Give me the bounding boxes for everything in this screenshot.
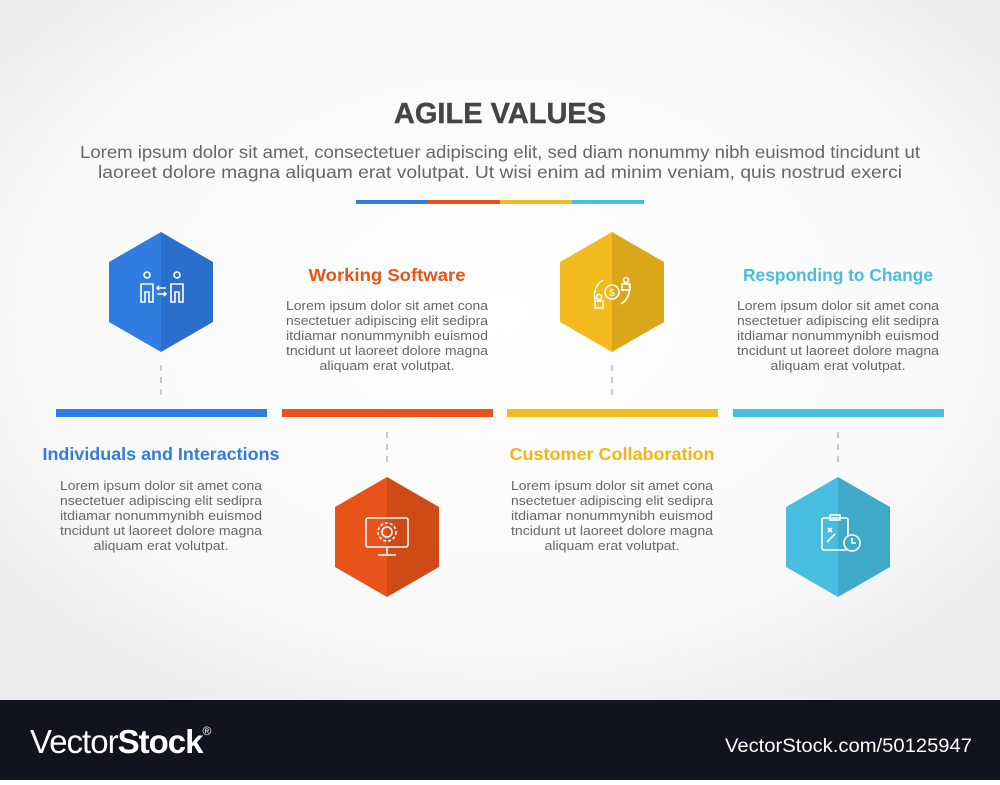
subtitle: laoreet dolore magna aliquam erat volutpat. Ut wisi enim ad minim veniam, quis nostrud exerci (98, 162, 902, 182)
section: individuals and interactions: Individuals and Interactions (42, 444, 280, 464)
section: responding to change: aliquam erat volutpat. (770, 359, 906, 373)
section: working software: tncidunt ut laoreet dolore magna (286, 344, 488, 358)
section: working software: itdiamar nonummynibh euismod (286, 329, 488, 343)
section: customer collaboration: nsectetuer adipiscing elit sedipra (511, 494, 713, 508)
connectors (161, 365, 838, 465)
section: customer collaboration: Customer Collaboration (510, 444, 714, 464)
footer: ® (202, 724, 211, 738)
section: responding to change: Lorem ipsum dolor sit amet cona (737, 299, 939, 313)
section: customer collaboration: aliquam erat volutpat. (544, 539, 680, 553)
subtitle (80, 142, 920, 182)
section: working software: Lorem ipsum dolor sit amet cona (286, 299, 488, 313)
footer: VectorStock.com/50125947 (725, 736, 972, 757)
section: individuals and interactions: tncidunt ut laoreet dolore magna (60, 524, 262, 538)
section: working software (286, 265, 488, 373)
hexagon 4: responding to change (786, 477, 890, 597)
section: customer collaboration: tncidunt ut laoreet dolore magna (511, 524, 713, 538)
hexagon 3: customer collaboration (560, 232, 664, 352)
hexagon 2: working software (335, 477, 439, 597)
hexagon 1: individuals (109, 232, 213, 352)
section: individuals and interactions: aliquam erat volutpat. (94, 539, 228, 553)
section: responding to change (737, 265, 939, 373)
section: customer collaboration: itdiamar nonummynibh euismod (511, 509, 713, 523)
section: responding to change: itdiamar nonummynibh euismod (737, 329, 939, 343)
title: AGILE VALUES (394, 98, 606, 130)
section: individuals and interactions: itdiamar nonummynibh euismod (60, 509, 262, 523)
section: responding to change: tncidunt ut laoreet dolore magna (737, 344, 939, 358)
section: customer collaboration: Lorem ipsum dolor sit amet cona (511, 479, 713, 493)
footer: VectorStock (30, 723, 202, 760)
section: individuals and interactions (42, 444, 280, 553)
section: responding to change: Responding to Change (743, 265, 933, 285)
section: individuals and interactions: Lorem ipsum dolor sit amet cona (60, 479, 262, 493)
section: responding to change: nsectetuer adipiscing elit sedipra (737, 314, 939, 328)
footer (0, 700, 1000, 780)
section: working software: nsectetuer adipiscing elit sedipra (286, 314, 488, 328)
section: customer collaboration (510, 444, 714, 553)
section: individuals and interactions: nsectetuer adipiscing elit sedipra (60, 494, 262, 508)
section: working software: aliquam erat volutpat. (320, 359, 454, 373)
hexagon 3: customer collaboration: $ (609, 288, 615, 299)
section: working software: Working Software (308, 265, 466, 285)
subtitle: Lorem ipsum dolor sit amet, consectetuer adipiscing elit, sed diam nonummy nibh euismod tincidunt ut (80, 142, 920, 162)
timeline bars (56, 409, 944, 417)
color divider (356, 200, 644, 204)
